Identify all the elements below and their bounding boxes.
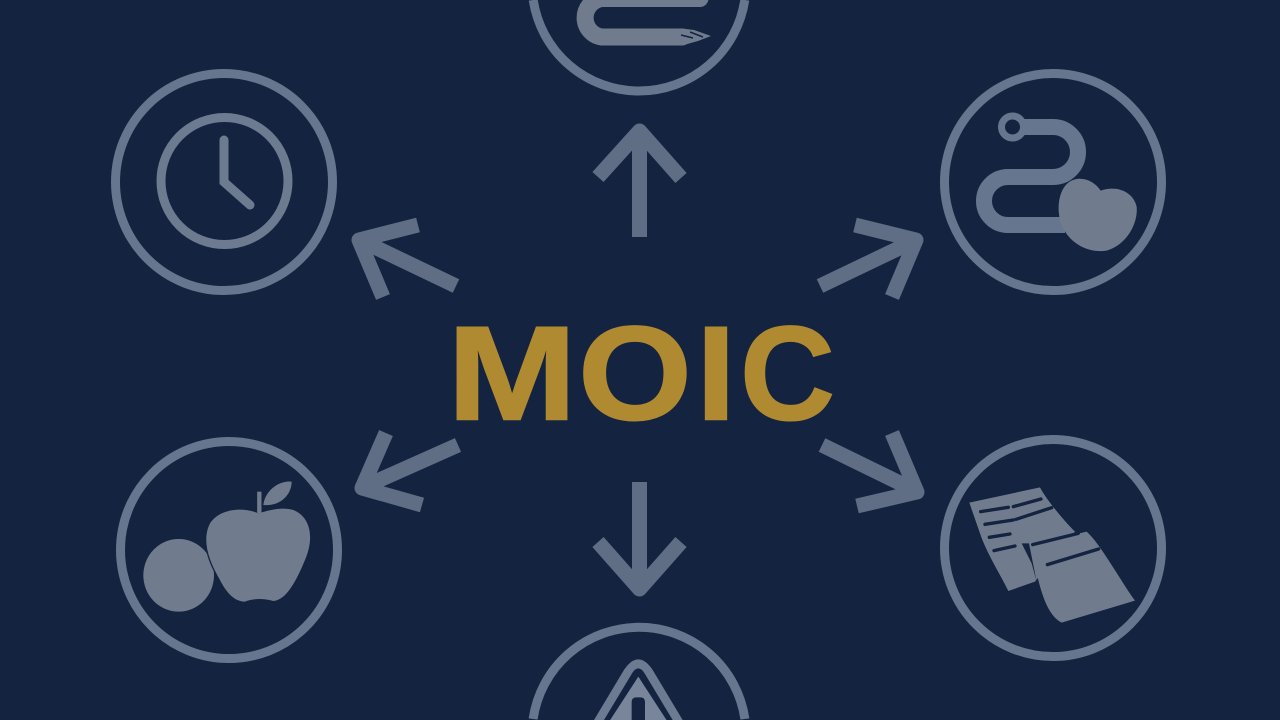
arrow: upper left — [359, 225, 456, 297]
icon: clock — [116, 74, 332, 290]
title: MOIC: O — [578, 300, 692, 448]
arrow: up — [598, 131, 681, 237]
icon: warning triangle (bottom, cropped) — [533, 627, 745, 720]
title: MOIC: I — [696, 300, 736, 448]
title: MOIC — [447, 300, 835, 448]
arrow: upper right — [820, 225, 916, 297]
arrow: lower left — [362, 433, 458, 505]
icon: path with heart — [944, 74, 1162, 290]
title: MOIC: M — [447, 300, 577, 448]
apple — [206, 509, 310, 602]
arrow: lower right — [822, 433, 917, 506]
orange — [143, 539, 214, 612]
title: MOIC: C — [740, 300, 835, 448]
icon: winding road (top, cropped) — [533, 0, 745, 91]
icon: fruit — [120, 442, 338, 658]
arrow: down — [598, 482, 681, 589]
icon: documents — [944, 440, 1162, 656]
